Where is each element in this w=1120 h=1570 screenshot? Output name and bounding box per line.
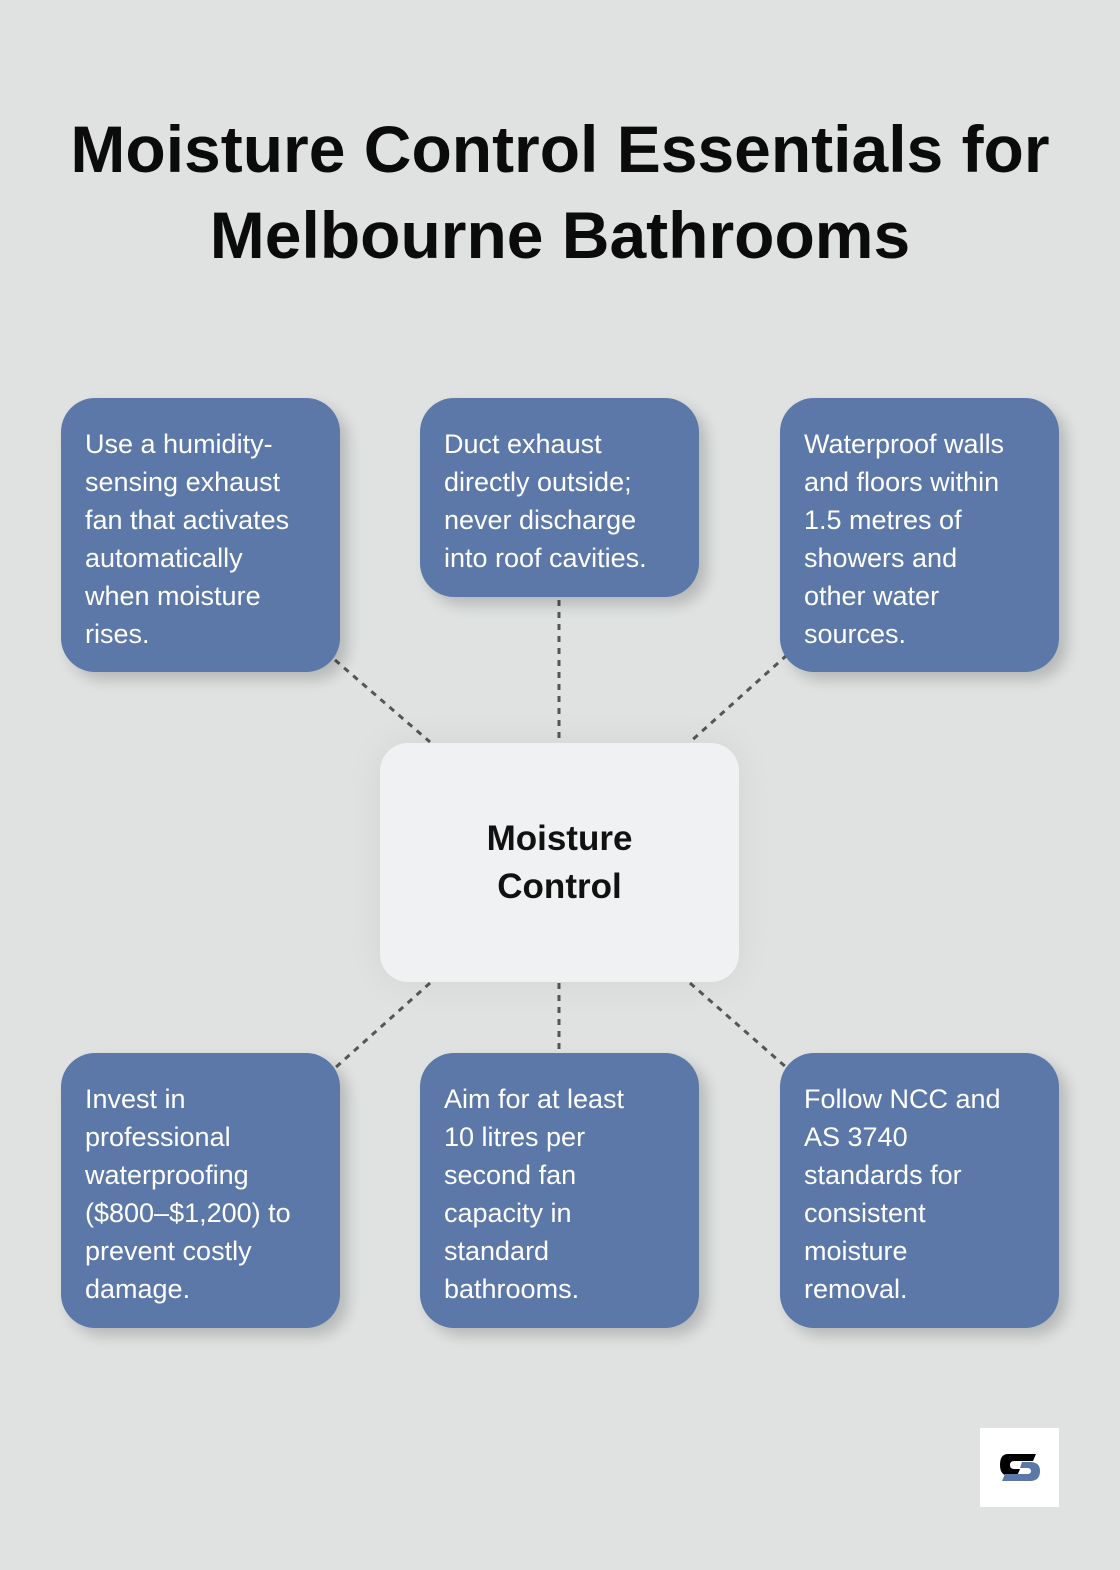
card: humidity fan: Use a humidity- (85, 429, 273, 459)
card: fan capacity: capacity in (444, 1198, 572, 1228)
center box: Moisture (487, 818, 632, 858)
card: standards: moisture (804, 1236, 908, 1266)
card: fan capacity: standard (444, 1236, 549, 1266)
card: fan capacity: second fan (444, 1160, 576, 1190)
card: fan capacity (420, 1053, 699, 1328)
card: professional waterproofing: professional (85, 1122, 231, 1152)
card: fan capacity: bathrooms. (444, 1274, 579, 1304)
card: humidity fan: fan that activates (85, 505, 289, 535)
card: duct exhaust: Duct exhaust (444, 429, 602, 459)
card: duct exhaust: into roof cavities. (444, 543, 647, 573)
center box (380, 743, 739, 982)
card: waterproof walls: sources. (804, 619, 906, 649)
card: humidity fan: when moisture (85, 581, 261, 611)
card: professional waterproofing (61, 1053, 340, 1328)
card: humidity fan: rises. (85, 619, 150, 649)
card: waterproof walls: showers and (804, 543, 957, 573)
card: waterproof walls: and floors within (804, 467, 999, 497)
card: duct exhaust (420, 398, 699, 597)
card: standards: removal. (804, 1274, 908, 1304)
card: humidity fan: sensing exhaust (85, 467, 280, 497)
card: standards: consistent (804, 1198, 926, 1228)
card: waterproof walls (780, 398, 1059, 672)
logo (980, 1428, 1059, 1507)
card: waterproof walls: Waterproof walls (804, 429, 1004, 459)
card: professional waterproofing: damage. (85, 1274, 190, 1304)
card: standards: standards for (804, 1160, 962, 1190)
card: fan capacity: 10 litres per (444, 1122, 585, 1152)
card: professional waterproofing: waterproofing (85, 1160, 249, 1190)
card: humidity fan (61, 398, 340, 672)
card: duct exhaust: directly outside; (444, 467, 632, 497)
card: waterproof walls: other water (804, 581, 939, 611)
card: professional waterproofing: prevent costly (85, 1236, 252, 1266)
card: standards (780, 1053, 1059, 1328)
card: fan capacity: Aim for at least (444, 1084, 624, 1114)
card: humidity fan: automatically (85, 543, 243, 573)
card: standards: AS 3740 (804, 1122, 908, 1152)
card: professional waterproofing: ($800–$1,200) to (85, 1198, 291, 1228)
card: professional waterproofing: Invest in (85, 1084, 186, 1114)
card: waterproof walls: 1.5 metres of (804, 505, 962, 535)
title: Moisture Control Essentials for (70, 112, 1050, 186)
center box: Control (497, 866, 622, 906)
title (70, 112, 1050, 272)
card: standards: Follow NCC and (804, 1084, 1001, 1114)
title: Melbourne Bathrooms (210, 198, 910, 272)
card: duct exhaust: never discharge (444, 505, 636, 535)
